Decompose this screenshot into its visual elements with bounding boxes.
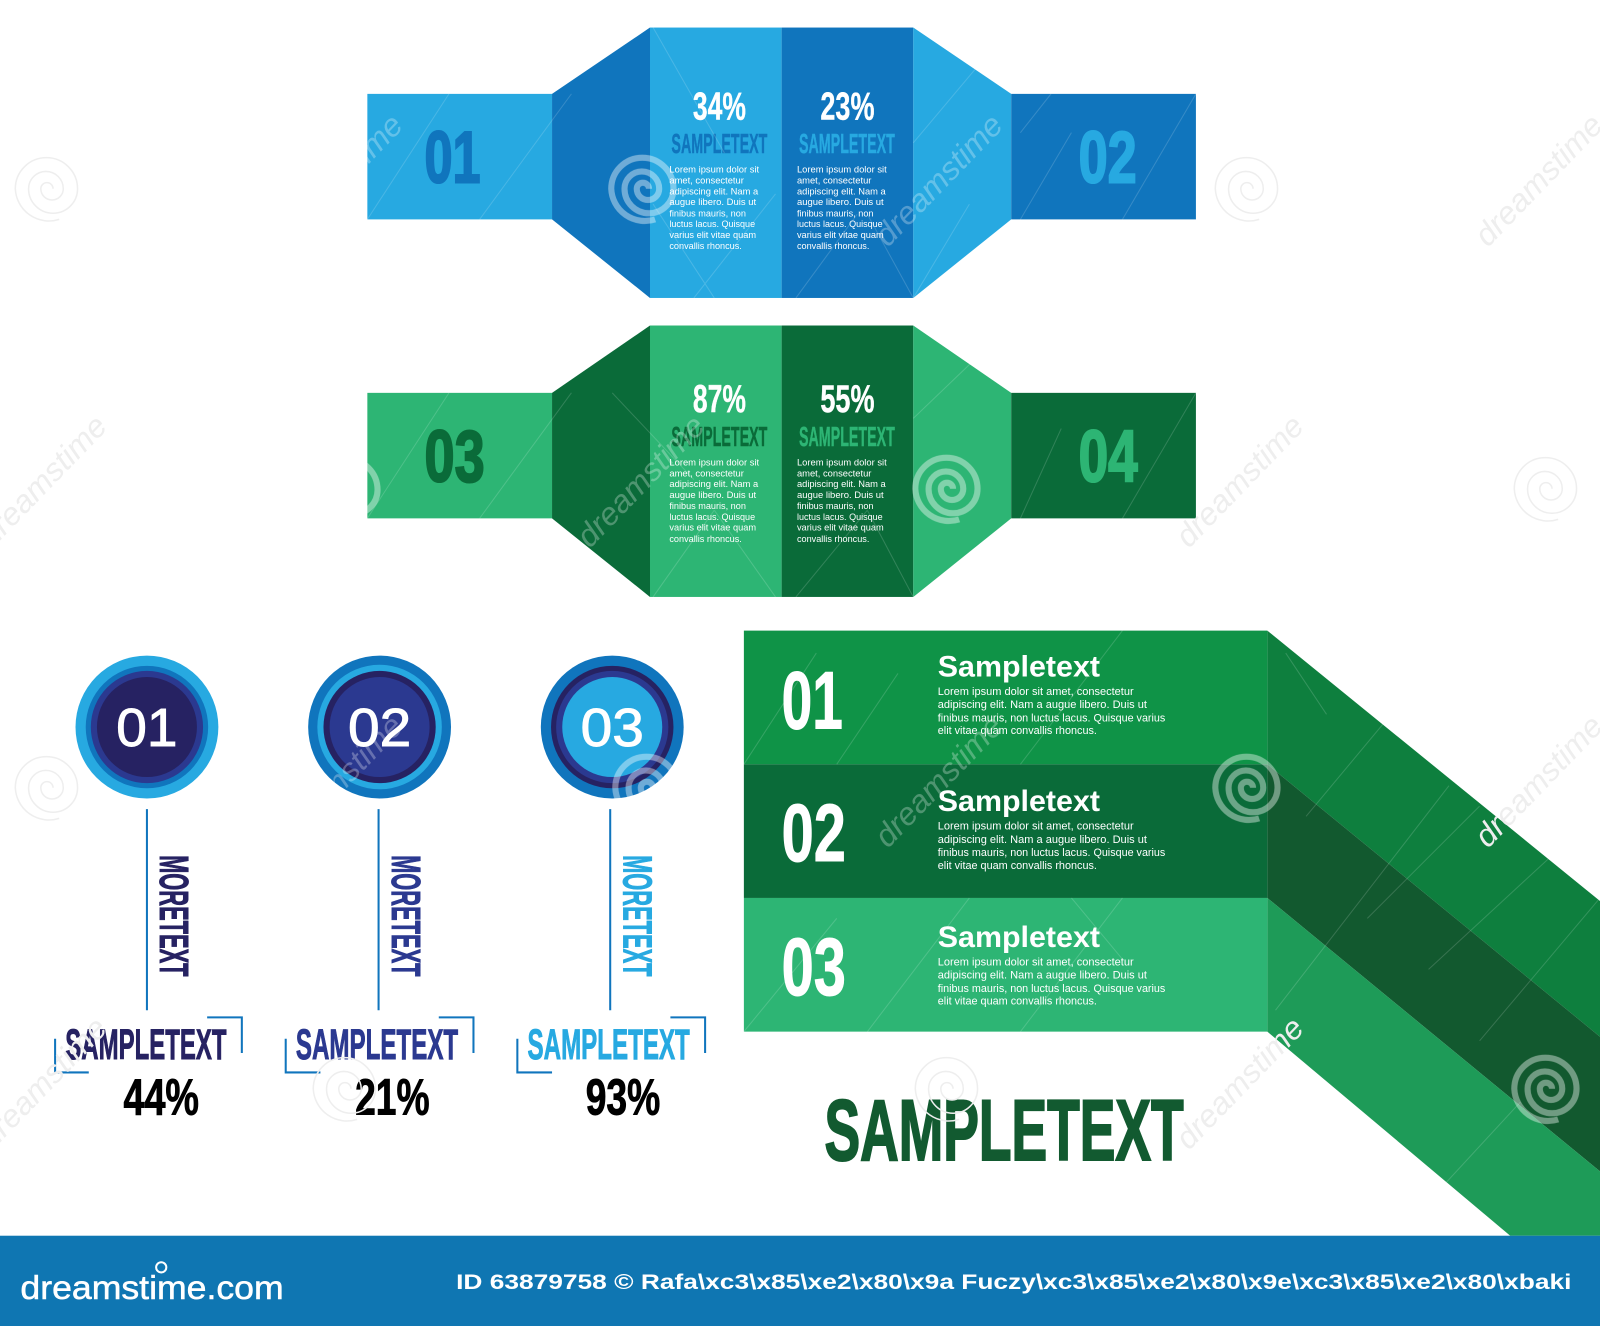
column: 55%: varius elit vitae quam (797, 523, 884, 534)
icon: ring badge 01: 01 (116, 698, 178, 758)
icon: ring badge 02 (308, 656, 451, 798)
column: 55%: luctus lacus. Quisque (797, 512, 883, 523)
vertical label: MORETEXT (151, 855, 197, 977)
row 02: 02 (782, 788, 846, 879)
diagonal ribbon bands (1267, 631, 1600, 1236)
column: 87%: 87% (693, 378, 746, 421)
column: 23%: Lorem ipsum dolor sit (797, 164, 887, 175)
row 01 (744, 631, 1267, 764)
heading: SAMPLETEXT (65, 1021, 227, 1069)
column: 23%: amet, consectetur (797, 176, 871, 187)
number 02: 02 (1079, 116, 1137, 199)
icon: ring badge 01 (76, 656, 218, 798)
column: 87%: varius elit vitae quam (669, 523, 756, 534)
column: 23%: augue libero. Duis ut (797, 197, 884, 208)
panel: green banner (367, 326, 1196, 597)
column: 23%: finibus mauris, non (797, 208, 873, 219)
column: 23%: SAMPLETEXT (799, 128, 895, 159)
column: 34%: augue libero. Duis ut (669, 197, 756, 208)
column: 34%: Lorem ipsum dolor sit (669, 164, 760, 175)
column: 34%: convallis rhoncus. (669, 241, 742, 252)
icon: ring badge 02: 02 (348, 698, 411, 758)
column: 87%: augue libero. Duis ut (669, 490, 756, 501)
column: 55%: 55% (820, 378, 874, 421)
footer credit: ID 63879758 © Rafa\xc3\x85\xe2\x80\x9a Fuczy\xc3\x85\xe2\x80\x9e\xc3\x85\xe2\x80\xbaki (456, 1270, 1571, 1294)
column: 23%: convallis rhoncus. (797, 241, 869, 252)
row 02 (744, 764, 1267, 898)
column: 87%: SAMPLETEXT (671, 421, 767, 452)
panel: circle item 02 (286, 656, 473, 1125)
column: 34%: finibus mauris, non (669, 208, 746, 219)
blue banner shapes (367, 28, 1196, 298)
number 04: 04 (1079, 415, 1138, 498)
heading: SAMPLETEXT (296, 1021, 458, 1069)
row 01: elit vitae quam convallis rhoncus. (938, 725, 1097, 737)
column: 34%: SAMPLETEXT (671, 128, 767, 159)
panel: blue banner (367, 28, 1196, 298)
column: 23%: varius elit vitae quam (797, 230, 884, 241)
row 03: Lorem ipsum dolor sit amet, consectetur (938, 956, 1134, 968)
watermark: dreamstime text (0, 107, 1600, 1156)
column: 34%: 34% (693, 85, 746, 128)
row 01: adipiscing elit. Nam a augue libero. Duis ut (938, 699, 1147, 711)
column: 55%: amet, consectetur (797, 469, 871, 480)
heading: SAMPLETEXT (528, 1021, 690, 1069)
column: 55%: Lorem ipsum dolor sit (797, 457, 887, 468)
percent: 93% (586, 1068, 660, 1125)
large heading: SAMPLETEXT (824, 1082, 1184, 1179)
watermark: dreamstime text: dreamstime (1168, 408, 1311, 554)
row 03: elit vitae quam convallis rhoncus. (938, 996, 1097, 1008)
number 01: 01 (424, 116, 481, 199)
vertical label: MORETEXT (614, 855, 660, 977)
vertical label: MORETEXT (383, 855, 429, 977)
column: 87%: amet, consectetur (669, 469, 744, 480)
column: 87%: finibus mauris, non (669, 501, 746, 512)
column: 23%: luctus lacus. Quisque (797, 219, 883, 230)
column: 87%: Lorem ipsum dolor sit (669, 457, 760, 468)
row 01: Sampletext (938, 651, 1100, 684)
column: 34%: adipiscing elit. Nam a (669, 186, 759, 197)
column: 55%: adipiscing elit. Nam a (797, 479, 886, 490)
row 01: Lorem ipsum dolor sit amet, consectetur (938, 686, 1134, 698)
column: 87%: luctus lacus. Quisque (669, 512, 755, 523)
column: 23%: 23% (820, 85, 874, 128)
column: 87% (669, 378, 767, 545)
percent: 44% (123, 1068, 199, 1125)
panel: circle item 01 (55, 656, 242, 1125)
number 03: 03 (424, 415, 485, 498)
icon: ring badge 03: 03 (581, 698, 644, 758)
watermark: dreamstime text: dreamstime (1168, 1010, 1311, 1156)
watermark: dreamstime text: dreamstime (569, 408, 712, 554)
green banner shapes (367, 326, 1196, 597)
row 03: Sampletext (938, 921, 1100, 954)
watermark: dreamstime text: dreamstime (867, 708, 1010, 854)
column: 55%: convallis rhoncus. (797, 534, 869, 545)
panel: circle item 03 (517, 656, 705, 1125)
row 02: finibus mauris, non luctus lacus. Quisque varius (938, 847, 1166, 859)
row 02: Lorem ipsum dolor sit amet, consectetur (938, 821, 1134, 833)
panel: folded green ribbon (744, 631, 1600, 1236)
column: 55%: augue libero. Duis ut (797, 490, 884, 501)
column: 55%: SAMPLETEXT (799, 421, 895, 452)
row 02: adipiscing elit. Nam a augue libero. Duis ut (938, 834, 1147, 846)
row 03: adipiscing elit. Nam a augue libero. Duis ut (938, 970, 1147, 982)
footer logo: dreamstime.com (20, 1270, 284, 1307)
column: 34%: luctus lacus. Quisque (669, 219, 755, 230)
row 01: finibus mauris, non luctus lacus. Quisque varius (938, 712, 1166, 724)
row 02: Sampletext (938, 785, 1100, 818)
row 03: 03 (782, 922, 846, 1013)
column: 87%: adipiscing elit. Nam a (669, 479, 759, 490)
row 03: finibus mauris, non luctus lacus. Quisque varius (938, 983, 1166, 995)
watermark: dreamstime text: dreamstime (267, 107, 410, 253)
column: 34%: amet, consectetur (669, 176, 744, 187)
watermark: dreamstime text: dreamstime (267, 708, 410, 854)
row 01: 01 (782, 656, 843, 747)
row 03 (744, 898, 1267, 1032)
column: 87%: convallis rhoncus. (669, 534, 742, 545)
icon: ring badge 03 (541, 656, 684, 798)
percent: 21% (355, 1068, 430, 1125)
footer bar (0, 1236, 1600, 1326)
watermark: dreamstime text: dreamstime (867, 107, 1010, 253)
column: 55%: finibus mauris, non (797, 501, 873, 512)
column: 55% (797, 378, 895, 545)
column: 34%: varius elit vitae quam (669, 230, 756, 241)
column: 23% (797, 85, 895, 252)
column: 34% (669, 85, 767, 252)
row 02: elit vitae quam convallis rhoncus. (938, 860, 1097, 872)
column: 23%: adipiscing elit. Nam a (797, 186, 886, 197)
watermark: spirals (15, 158, 1577, 1121)
